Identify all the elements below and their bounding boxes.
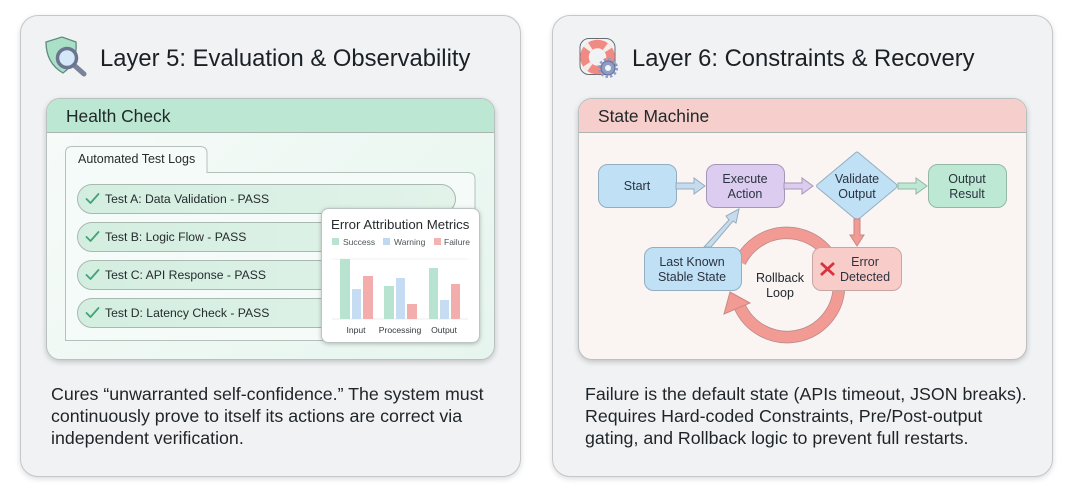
arrow: stable state to execute [704, 209, 739, 247]
description: Layer 6: gating, and Rollback logic to prevent full restarts. [585, 428, 968, 448]
legend: Failure [444, 237, 470, 247]
row: Test B: Test B: Logic Flow - PASS [105, 230, 246, 244]
node: Error Detected: Error [851, 255, 879, 269]
node: Start: Start [624, 179, 651, 193]
heading: State Machine [579, 99, 1026, 133]
legend [332, 237, 470, 247]
panel: Layer 5 [20, 15, 521, 477]
row: Test A [77, 184, 456, 214]
arrow: validate to output [898, 178, 927, 194]
chart card: Error Attribution Metrics [318, 206, 482, 346]
heading: State Machine: State Machine [598, 106, 709, 126]
arrow: validate to error [850, 219, 864, 246]
chart card: Error Attribution Metrics: Error Attribution Metrics [331, 217, 470, 232]
arrow: start to execute [676, 178, 705, 194]
icons: check marks [86, 193, 100, 318]
axis labels: Input [346, 325, 366, 335]
row: Test C [77, 260, 456, 290]
node: Execute Action: Action [728, 187, 762, 201]
node: Error Detected [812, 248, 902, 290]
panel: Layer 6 [552, 15, 1053, 477]
icon: shield with magnifying glass [45, 36, 86, 76]
title: Layer 5: Layer 5: Evaluation & Observability [100, 45, 470, 72]
icon: life ring with gear [580, 38, 618, 78]
row: Test D [77, 298, 456, 328]
label: Rollback Loop [756, 271, 805, 300]
node: Last Known Stable State [644, 248, 742, 290]
label: Rollback Loop: Rollback [756, 271, 805, 285]
flowchart: state machine [598, 152, 1007, 344]
axis labels: Processing [379, 325, 421, 335]
heading: Health Check [47, 99, 494, 133]
tab label: Automated Test Logs: Automated Test Logs [78, 152, 195, 166]
heading: Health Check: Health Check [66, 106, 170, 126]
description: Layer 6: Failure is the default state (APIs timeout, JSON breaks). [585, 384, 1027, 404]
description: Layer 6 [585, 384, 1027, 448]
node: Output Result: Result [949, 187, 985, 201]
node: Validate Output: Validate [835, 172, 879, 186]
label: Rollback Loop: Loop [766, 286, 794, 300]
bars [332, 259, 468, 319]
axis labels [346, 325, 458, 335]
node: Validate Output [816, 152, 897, 219]
description: Layer 5: independent verification. [51, 428, 244, 448]
node: Start [598, 164, 676, 208]
description: Layer 6: Requires Hard-coded Constraints, Pre/Post-output [585, 406, 982, 426]
node: Execute Action: Execute [722, 172, 768, 186]
description: Layer 5: Cures “unwarranted self-confidence.” The system must [51, 384, 484, 404]
card: State Machine [578, 98, 1027, 360]
row: Test B [77, 222, 456, 252]
legend: Warning [394, 237, 426, 247]
axis labels: Output [431, 325, 458, 335]
card: Health Check [46, 98, 495, 360]
node: Validate Output: Output [838, 187, 876, 201]
description: Layer 5 [51, 384, 484, 448]
row: Test A: Test A: Data Validation - PASS [105, 192, 269, 206]
row: Test C: Test C: API Response - PASS [105, 268, 266, 282]
description: Layer 5: continuously prove to itself its actions are correct via [51, 406, 462, 426]
node: Error Detected: Detected [840, 270, 890, 284]
node: Last Known Stable State: Last Known [659, 255, 725, 269]
node: Execute Action [706, 164, 784, 208]
node: Output Result [928, 164, 1006, 208]
row: Test D: Test D: Latency Check - PASS [105, 306, 269, 320]
icon: red cross [821, 263, 834, 275]
arrow: rollback loop [724, 233, 839, 337]
legend: Success [343, 237, 375, 247]
arrow: execute to validate [784, 178, 813, 194]
node: Last Known Stable State: Stable State [658, 270, 726, 284]
title: Layer 6: Layer 6: Constraints & Recovery [632, 45, 975, 72]
node: Output Result: Output [948, 172, 986, 186]
panel: Automated Test Logs [65, 146, 476, 341]
